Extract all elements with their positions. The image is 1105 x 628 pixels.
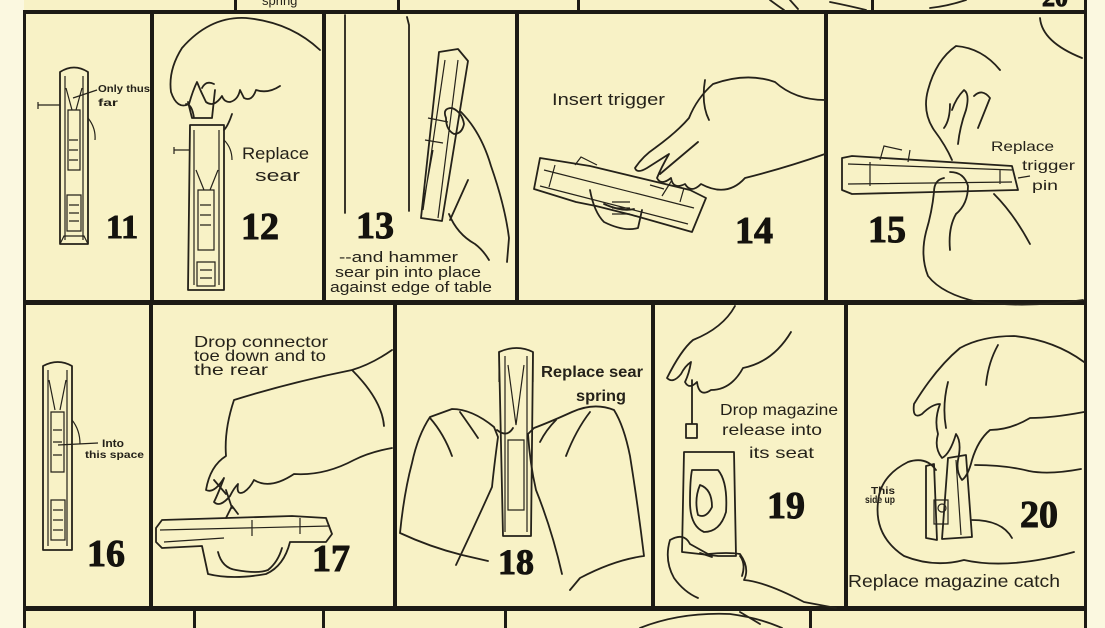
- step number 16: 16: [87, 533, 125, 575]
- label: drop magazine release: [720, 402, 838, 462]
- hand drawing 14: [635, 77, 825, 190]
- label: into this space: this space: [85, 449, 144, 461]
- label: replace sear: Replace: [242, 144, 309, 163]
- bottom row cropped fragments: [640, 612, 782, 628]
- label: this side up: This: [871, 486, 896, 497]
- label: replace sear spring: spring: [576, 388, 626, 405]
- label: drop connector: the rear: [194, 362, 269, 379]
- label: into this space: [85, 438, 144, 461]
- label: into this space: Into: [102, 438, 124, 450]
- frame drawing 16: [43, 362, 98, 550]
- label: replace trigger pin: Replace: [991, 138, 1054, 154]
- label: this side up: side up: [865, 495, 895, 506]
- frame drawing 20: [926, 455, 972, 540]
- left hand drawing 18: [400, 409, 513, 565]
- label: insert trigger: Insert trigger: [552, 90, 665, 109]
- label: replace trigger pin: [991, 138, 1075, 193]
- frame drawing 14: [534, 157, 706, 232]
- label: replace trigger pin: trigger: [1022, 157, 1075, 173]
- panel 16: [43, 362, 144, 575]
- step number 12: 12: [241, 206, 279, 248]
- step number 11: 11: [106, 209, 138, 246]
- upper hand drawing 19: [667, 306, 791, 438]
- caption 13: --and hammer: [339, 249, 458, 266]
- right hand drawing 18: [528, 406, 644, 590]
- label: drop connector: [194, 334, 329, 379]
- label: drop connector: Drop connector: [194, 334, 329, 351]
- label: replace sear spring: Replace sear: [541, 364, 643, 381]
- panel 14: [534, 77, 825, 252]
- panel 13: [330, 15, 509, 296]
- step number 17: 17: [312, 538, 350, 580]
- label: replace sear: sear: [255, 166, 300, 185]
- frame drawing 18: [499, 348, 533, 536]
- step number 18: 18: [498, 542, 534, 582]
- caption 13: against edge of table: [330, 279, 492, 296]
- step number 20: 20: [1020, 494, 1058, 536]
- panel 18: [400, 348, 644, 590]
- hand and frame drawing 12: [170, 18, 320, 290]
- top row cropped fragments: [262, 0, 1068, 12]
- upper hand drawing 15: [926, 18, 1082, 160]
- label: only thus far: Only thus: [98, 83, 150, 95]
- lower hand drawing 15: [923, 172, 1083, 305]
- frame drawing 17: [156, 506, 332, 577]
- panel 19: [667, 306, 838, 608]
- label: replace trigger pin: pin: [1032, 177, 1058, 193]
- caption 13: sear pin into place: [335, 264, 481, 281]
- label: drop magazine release: its seat: [749, 445, 815, 462]
- frame drawing 11: [38, 68, 95, 244]
- table edge and hand drawing 13: [345, 15, 509, 262]
- step number 14: 14: [735, 210, 773, 252]
- lower hand drawing 19: [668, 537, 836, 608]
- panel 20: [848, 336, 1084, 591]
- panel 17: [156, 334, 392, 580]
- label: drop magazine release: Drop magazine: [720, 402, 838, 419]
- panel 15: [842, 18, 1083, 305]
- label: this side up: [865, 486, 896, 506]
- caption 13: [330, 249, 492, 296]
- panel 12: [170, 18, 320, 290]
- hand drawing 17: [206, 350, 392, 508]
- label: only thus far: far: [98, 97, 118, 109]
- upper hand drawing 20: [914, 336, 1084, 480]
- step number 19: 19: [767, 485, 805, 527]
- label: only thus far: [73, 83, 150, 109]
- panel 11: [38, 68, 150, 246]
- magazine frame drawing 19: [682, 452, 736, 556]
- step number 15: 15: [868, 209, 906, 251]
- label: replace sear spring: [541, 364, 643, 405]
- caption 20: Replace magazine catch: [848, 571, 1060, 591]
- frame drawing 15: [842, 146, 1030, 194]
- label: drop connector: toe down and to: [194, 348, 326, 365]
- label: drop magazine release: release into: [722, 422, 822, 439]
- lower hand drawing 20: [878, 460, 1081, 564]
- step number 13: 13: [356, 205, 394, 247]
- label: replace sear: [242, 144, 309, 185]
